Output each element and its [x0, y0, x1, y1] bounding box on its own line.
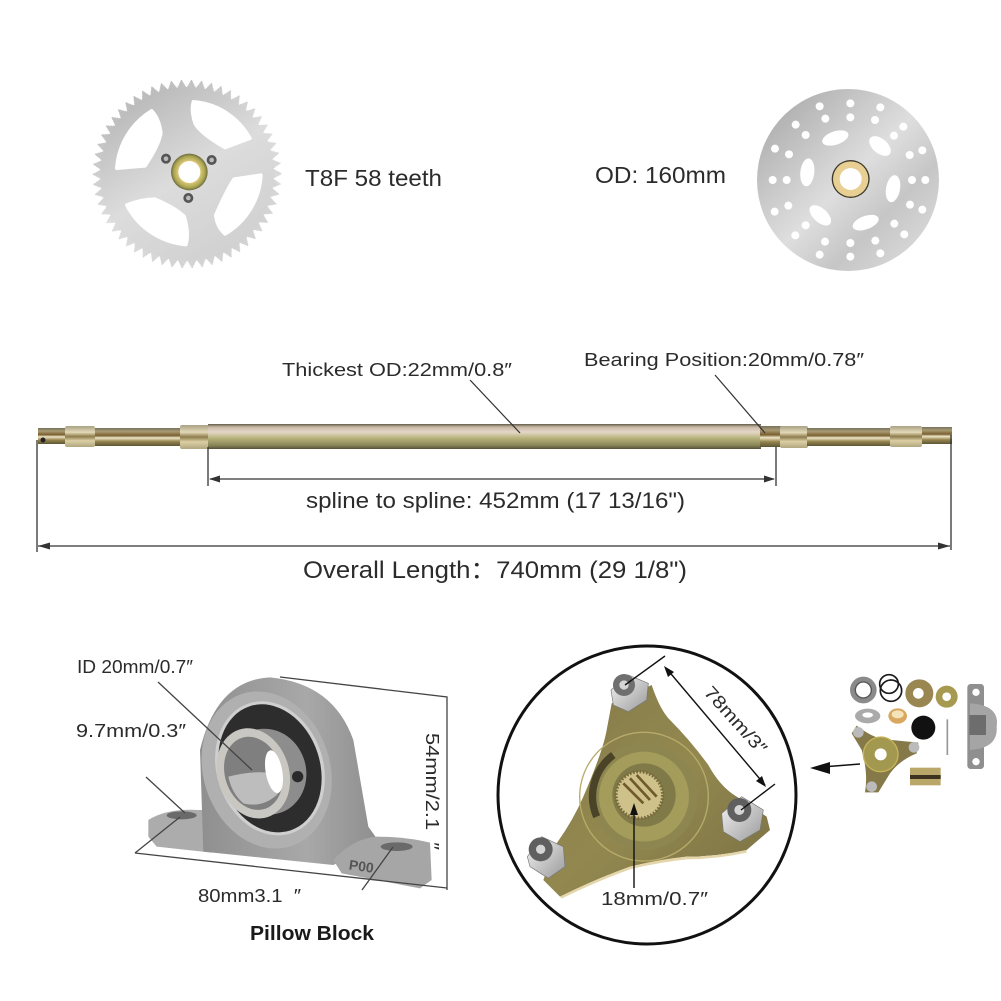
- pillow block: P00: [348, 856, 375, 876]
- three-bolt hub: [527, 674, 770, 899]
- label: 78mm rotated: 78mm/3″: [700, 682, 772, 759]
- flat washer: [855, 709, 880, 723]
- pointer: thickest OD: [470, 380, 520, 433]
- label: spline to spline: spline to spline: 452mm (17 13/16"): [306, 488, 685, 513]
- parts kit: [850, 675, 997, 792]
- label: OD 160mm: OD: 160mm: [595, 162, 726, 188]
- dimension: overall length: [37, 435, 951, 552]
- label: 18mm: 18mm/0.7″: [601, 889, 709, 909]
- label: ID 20mm: ID 20mm/0.7″: [77, 657, 194, 677]
- pillow block dimension lines: [135, 677, 447, 890]
- axle shaft: [38, 424, 952, 449]
- o-rings: [880, 675, 902, 701]
- small pillow block: [967, 684, 997, 769]
- label: thickest OD: Thickest OD:22mm/0.8″: [282, 360, 513, 380]
- bearing: [850, 677, 877, 703]
- pillow block: [148, 674, 432, 888]
- bushing: [888, 708, 907, 724]
- label: bearing position: Bearing Position:20mm/0.78″: [584, 350, 865, 370]
- label: 80mm: 80mm3.1 ″: [198, 886, 302, 906]
- label: pillow block: Pillow Block: [250, 923, 375, 945]
- cotter pin: [945, 719, 950, 755]
- arrow: to hub: [810, 762, 860, 774]
- pointer: 18mm: [630, 803, 638, 888]
- label: T8F 58 teeth: T8F 58 teeth: [305, 165, 442, 191]
- label: 54mm rotated: 54mm/2.1 ″: [422, 733, 442, 851]
- washer: [905, 679, 933, 707]
- brake disc: [757, 89, 939, 271]
- label: overall length: Overall Length：740mm (29 1/8"): [303, 557, 687, 584]
- black cap: [911, 716, 935, 740]
- dimension: spline to spline: [208, 447, 776, 486]
- sleeve: [910, 768, 941, 785]
- label: 9.7mm: 9.7mm/0.3″: [76, 721, 187, 741]
- small hub: [852, 726, 919, 792]
- castle nut: [936, 686, 958, 708]
- sprocket: T8F 58 teeth: [94, 81, 280, 267]
- panel: hub circle: [498, 646, 796, 944]
- dimension: 78mm: [625, 656, 775, 810]
- pointer: bearing position: [715, 375, 765, 433]
